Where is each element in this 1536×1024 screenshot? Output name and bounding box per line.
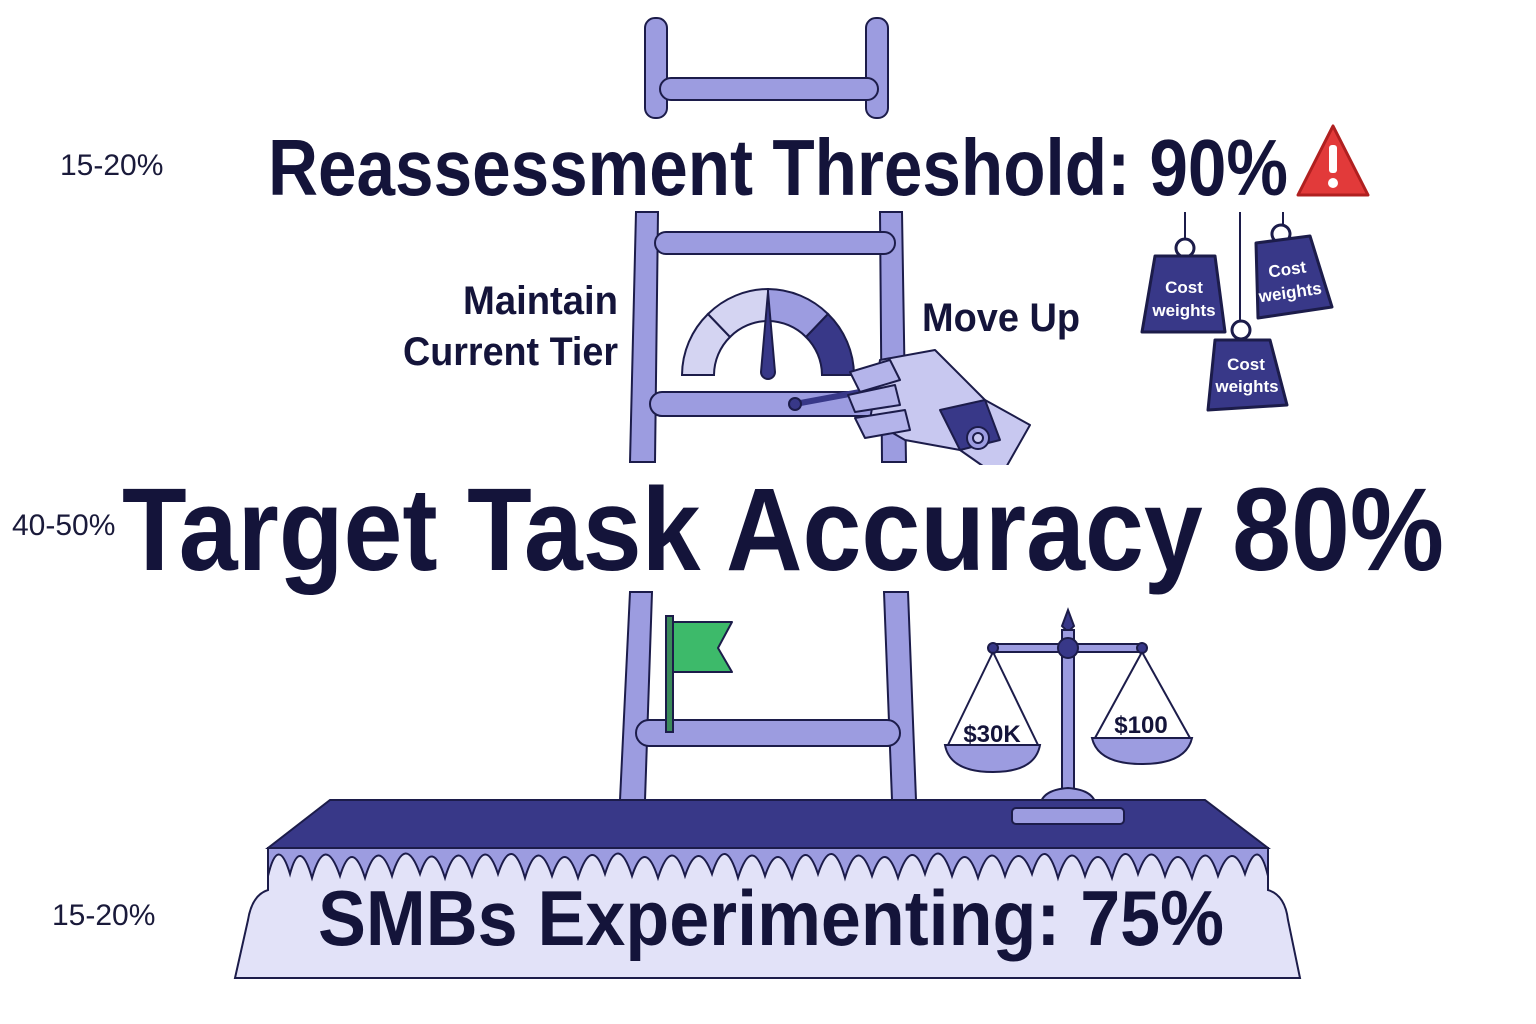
label: scale values (963, 712, 1168, 748)
gauge (682, 289, 854, 379)
ladder: middle segment (630, 212, 906, 462)
icon: cost weights: weights (1151, 301, 1216, 320)
icon: green flag (666, 616, 732, 732)
label: move up: Move Up (922, 296, 1080, 340)
icon: robot hand (848, 350, 1030, 478)
title: reassessment threshold: Reassessment Threshold: 90% (268, 123, 1288, 212)
ladder: top segment (645, 18, 888, 118)
icon: cost weights: weights (1257, 279, 1323, 307)
ladder: lower segment (620, 592, 916, 800)
lever (789, 392, 860, 410)
platform (235, 800, 1300, 978)
label: scale values: $30K (963, 721, 1021, 748)
label: maintain current tier (403, 279, 618, 374)
icon: cost weights (1142, 212, 1332, 410)
side label bottom: 15-20% (52, 899, 155, 932)
icon: cost weights: Cost (1267, 257, 1308, 282)
icon: cost weights: Cost (1165, 278, 1203, 297)
label: maintain current tier: Maintain (463, 279, 618, 323)
icon: warning triangle (1298, 126, 1368, 195)
label: maintain current tier: Current Tier (403, 330, 618, 374)
side label middle: 40-50% (12, 509, 115, 542)
side label top: 15-20% (60, 149, 163, 182)
title: smbs experimenting: SMBs Experimenting: 75% (318, 874, 1224, 962)
icon: cost weights: Cost (1227, 355, 1265, 374)
icon: balance scale (945, 610, 1192, 824)
label: scale values: $100 (1114, 712, 1168, 739)
icon: cost weights: weights (1214, 377, 1279, 396)
